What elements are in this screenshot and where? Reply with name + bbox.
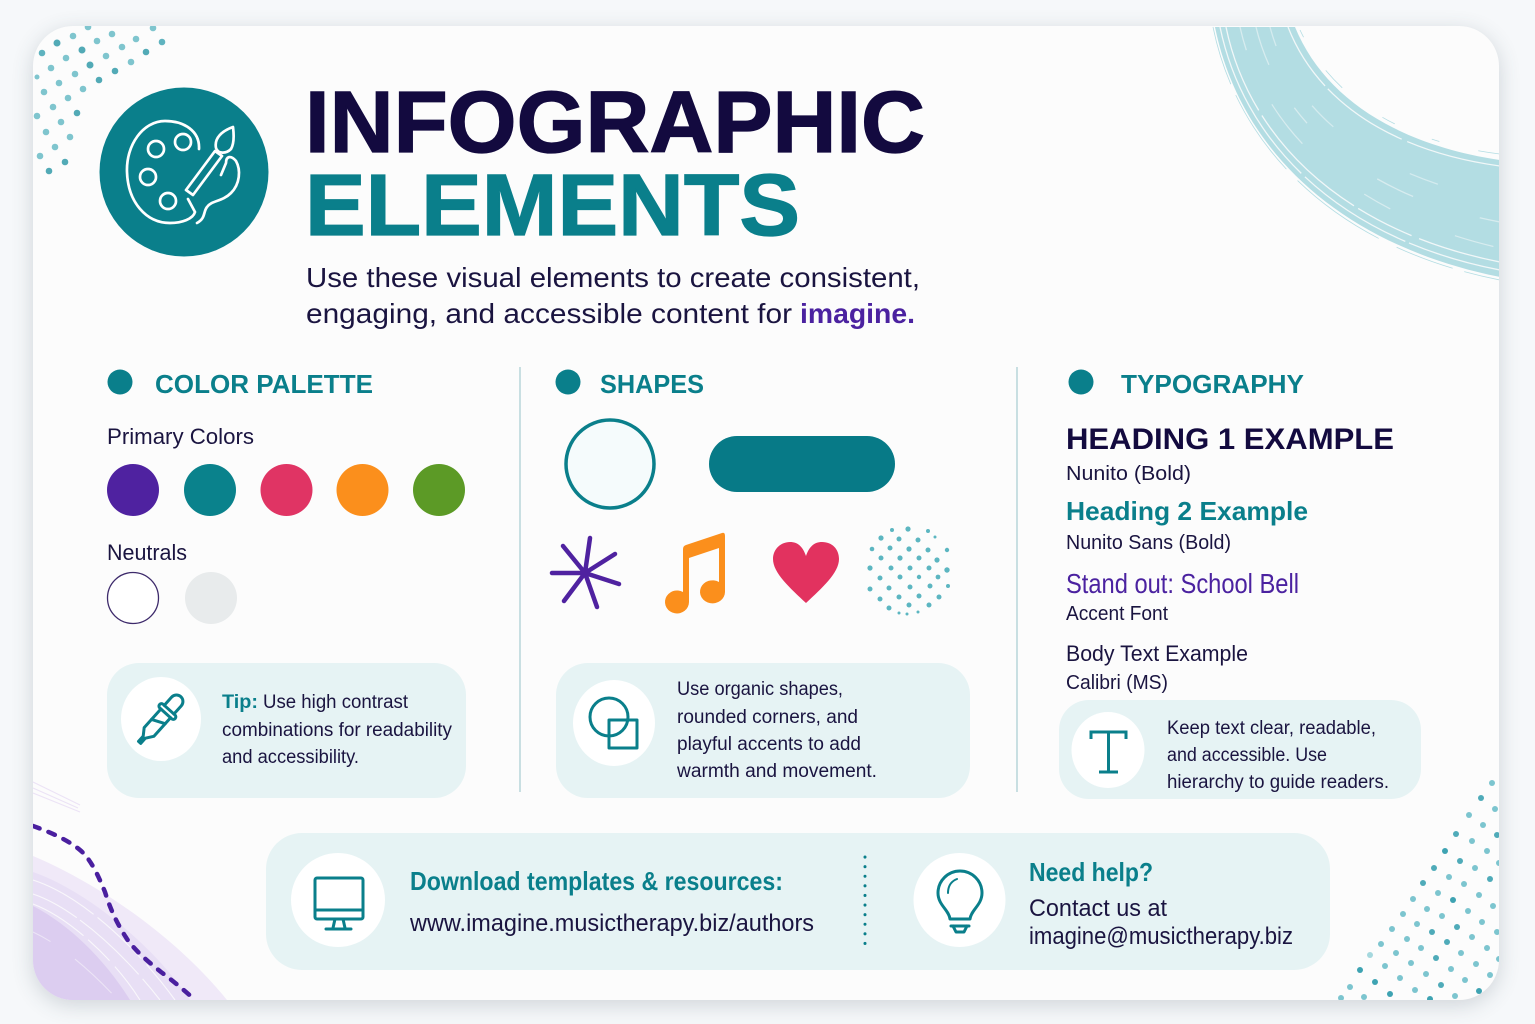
- callout: contrast tip: [107, 663, 466, 798]
- text: readable: hierarchy to guide readers.: [1167, 772, 1389, 793]
- sample: heading 2: [1066, 496, 1308, 554]
- icon: circle and square: [590, 698, 637, 748]
- shape: dotted circle: [867, 526, 950, 616]
- heading: shapes: SHAPES: [600, 369, 704, 399]
- text: readable: and accessible. Use: [1167, 745, 1327, 766]
- decoration: bottom-right dots: [1338, 780, 1502, 1002]
- subtitle: imagine.: [800, 298, 915, 329]
- text: need help: imagine@musictherapy.biz: [1029, 923, 1293, 950]
- sample: heading 1: [1066, 423, 1394, 485]
- icon: heart: [773, 542, 839, 603]
- text: need help: Contact us at: [1029, 895, 1167, 922]
- sample: accent font: [1066, 568, 1299, 625]
- panel: typography: [1059, 369, 1421, 799]
- callout: readable text tip: [1059, 700, 1421, 799]
- text: download templates: www.imagine.musictherapy.biz/authors: [409, 910, 814, 937]
- sample: heading 1: Nunito (Bold): [1066, 463, 1191, 485]
- sample: accent font: Stand out: School Bell: [1066, 568, 1299, 599]
- swatches: primary colors: [107, 464, 465, 516]
- callout: organic shapes tip: [556, 663, 970, 798]
- sample: body text: Calibri (MS): [1066, 672, 1168, 694]
- text: organic shapes: [676, 679, 877, 782]
- shape: teal pill: [709, 436, 895, 492]
- icon: eyedropper: [132, 690, 189, 749]
- text: tip: combinations for readability: [222, 720, 452, 741]
- panel: shapes: [552, 369, 970, 798]
- icon: artist palette badge: [100, 88, 268, 256]
- text: organic shapes: warmth and movement.: [676, 761, 877, 782]
- text: tip: and accessibility.: [222, 747, 359, 768]
- icon: music note: [665, 533, 725, 613]
- label: primary colors: Primary Colors: [107, 424, 254, 449]
- shape: purple asterisk: [552, 538, 619, 607]
- text: tip: Use high contrast: [263, 692, 409, 713]
- heading: typography: TYPOGRAPHY: [1121, 369, 1304, 399]
- sample: accent font: Accent Font: [1066, 603, 1168, 625]
- text: readable: [1167, 718, 1389, 793]
- text: tip: Tip:: [222, 692, 258, 713]
- sample: heading 1: HEADING 1 EXAMPLE: [1066, 423, 1394, 456]
- decoration: top-right teal brush stroke: [1213, 27, 1500, 280]
- text: organic shapes: Use organic shapes,: [677, 679, 843, 700]
- panel: footer resources: [266, 833, 1330, 970]
- title: INFOGRAPHIC: [305, 74, 925, 171]
- decoration: top-left dots: [34, 24, 165, 174]
- decoration: purple dashed path: [33, 826, 195, 1000]
- text: organic shapes: rounded corners, and: [677, 707, 858, 728]
- title: [305, 74, 925, 254]
- icon: monitor: [291, 853, 385, 947]
- text: download templates: Download templates & resources:: [410, 866, 783, 896]
- sample: heading 2: Nunito Sans (Bold): [1066, 532, 1231, 554]
- text: need help: [1029, 857, 1293, 950]
- swatches: neutrals: [108, 572, 237, 624]
- subtitle: engaging, and accessible content for: [306, 298, 792, 329]
- text: tip: [222, 692, 452, 768]
- sample: heading 2: Heading 2 Example: [1066, 496, 1308, 526]
- sample: body text: [1066, 641, 1248, 694]
- text: need help: Need help?: [1029, 857, 1153, 887]
- title: ELEMENTS: [305, 157, 800, 254]
- icon: letter T: [1091, 732, 1126, 772]
- heading: shapes: [556, 369, 704, 399]
- label: neutrals: Neutrals: [107, 540, 187, 565]
- text: readable: Keep text clear, readable,: [1167, 718, 1376, 739]
- heading: color palette: COLOR PALETTE: [155, 369, 373, 399]
- panel: color palette: [107, 369, 466, 798]
- text: download templates: [409, 866, 814, 937]
- shape: outlined circle: [566, 420, 654, 508]
- icon: light bulb: [914, 853, 1006, 947]
- decoration: bottom-left purple brush stroke: [33, 782, 227, 1000]
- subtitle: [306, 262, 920, 329]
- text: organic shapes: playful accents to add: [677, 734, 861, 755]
- subtitle: Use these visual elements to create consistent,: [306, 262, 920, 293]
- sample: body text: Body Text Example: [1066, 641, 1248, 666]
